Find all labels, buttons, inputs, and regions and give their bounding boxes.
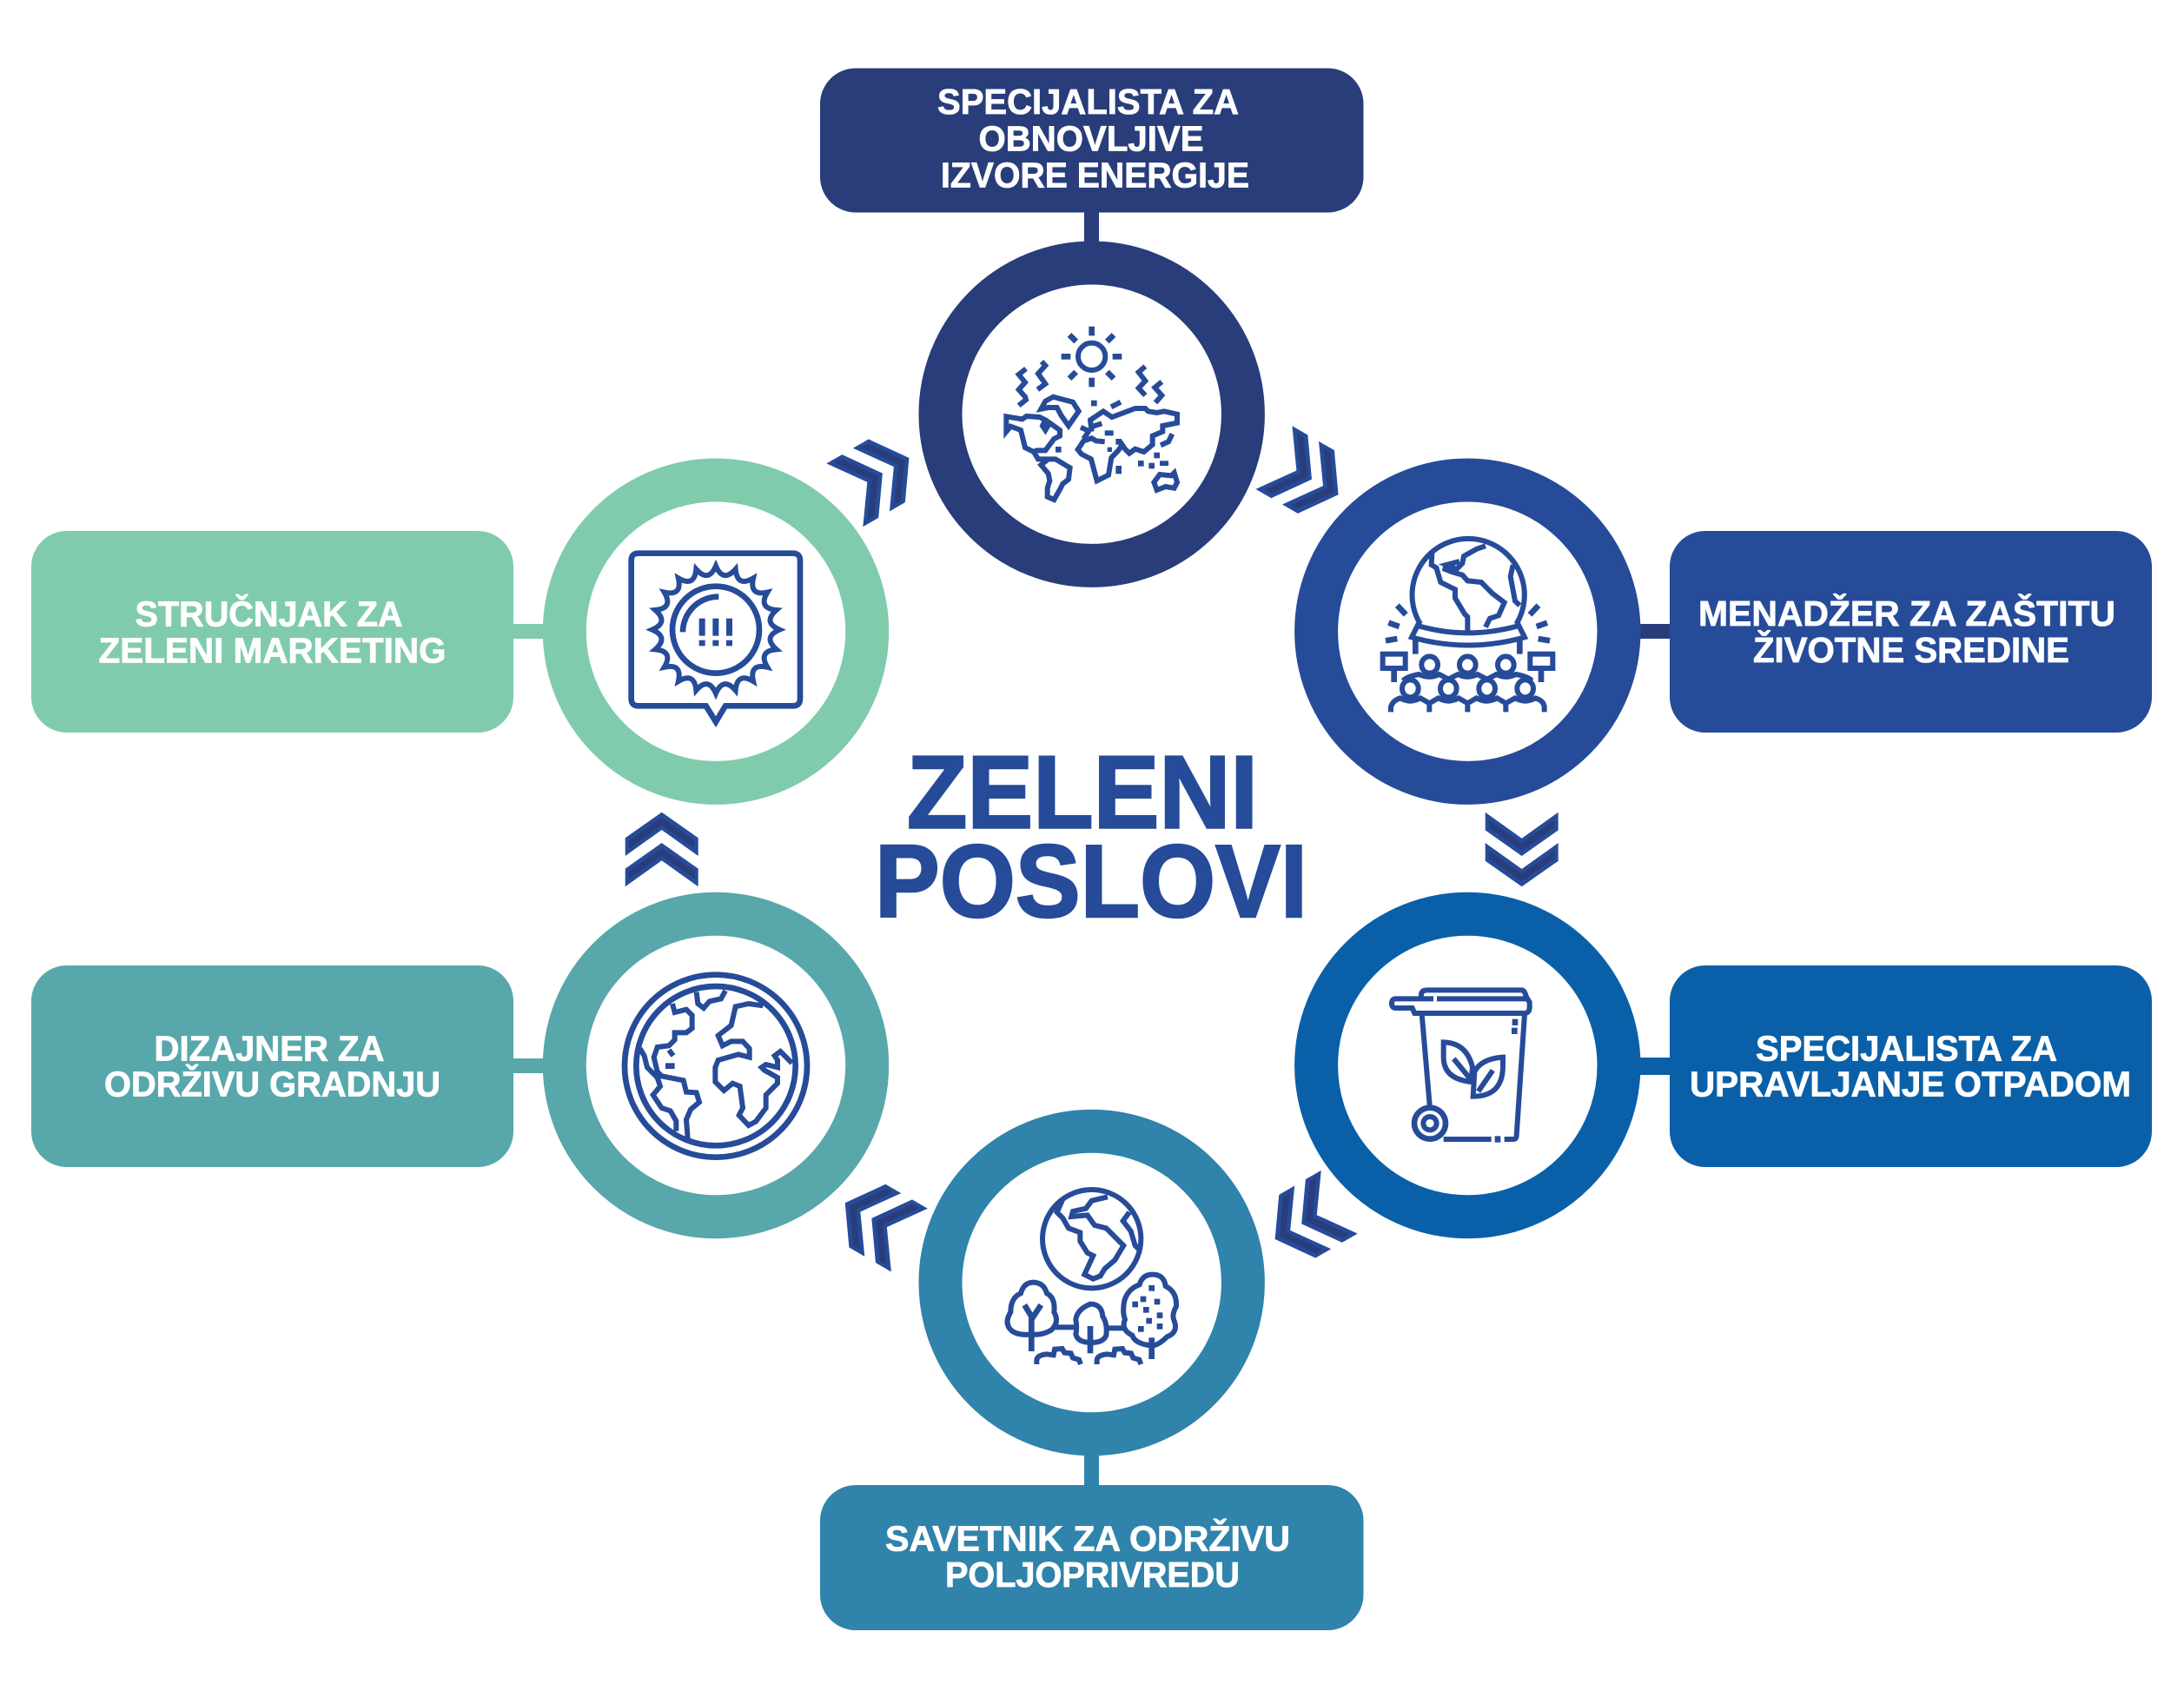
arrow: upper left to top: [826, 427, 927, 527]
title: Zeleni poslovi: ZELENI: [907, 735, 1258, 850]
ring: waste management: [1316, 914, 1619, 1217]
label box: sustainable construction designer: DIZAJNER ZA: [155, 1029, 384, 1069]
panel: green marketing expert: [31, 480, 867, 783]
ring: green marketing: [565, 480, 867, 783]
arrow: bottom to lower left: [827, 1171, 928, 1271]
title: Zeleni poslovi: POSLOVI: [875, 824, 1307, 939]
ring: sustainable construction: [565, 914, 867, 1217]
label box: green marketing expert: ZELENI MARKETING: [99, 631, 447, 671]
panel: environmental protection manager: [1316, 480, 2152, 783]
label box: environmental protection manager: ŽIVOTNE SREDINE: [1753, 630, 2069, 670]
label box: renewable energy specialist: [820, 68, 1364, 212]
icon: speech bubble with sun badge: [632, 554, 800, 722]
arrow: lower left to upper left: [625, 813, 698, 886]
label box: sustainable agriculture advisor: [820, 1485, 1364, 1630]
label box: renewable energy specialist: OBNOVLJIVE: [978, 118, 1204, 158]
label box: renewable energy specialist: SPECIJALISTA ZA: [937, 82, 1239, 122]
label box: environmental protection manager: MENADŽER ZA ZAŠTITU: [1698, 594, 2115, 633]
ring: renewable energy: [940, 262, 1243, 566]
label box: renewable energy specialist: IZVORE ENERGIJE: [941, 155, 1249, 195]
panel: sustainable construction designer: [31, 914, 867, 1217]
title: Zeleni poslovi: [875, 735, 1307, 939]
arrow: top to upper right: [1255, 426, 1357, 527]
label box: sustainable agriculture advisor: SAVETNIK ZA ODRŽIVU: [885, 1519, 1290, 1559]
label box: green marketing expert: [31, 531, 513, 733]
icon: earth globe: [625, 975, 807, 1157]
label box: sustainable construction designer: [31, 965, 513, 1167]
ring: sustainable agriculture: [940, 1131, 1243, 1434]
label box: waste management specialist: UPRAVLJANJE OTPADOM: [1690, 1064, 2131, 1104]
label box: sustainable construction designer: ODRŽIVU GRADNJU: [104, 1064, 440, 1104]
label box: waste management specialist: SPECIJALISTA ZA: [1756, 1029, 2057, 1069]
label box: waste management specialist: [1670, 965, 2152, 1167]
label box: green marketing expert: STRUČNJAK ZA: [136, 594, 403, 634]
icon: globe with trees: [1008, 1190, 1176, 1364]
icon: world map with sun: [1006, 327, 1177, 500]
icon: globe with crowd: [1383, 539, 1552, 712]
panel: waste management specialist: [1316, 914, 2152, 1217]
arrow: lower right to bottom: [1257, 1171, 1358, 1270]
arrow: upper right to lower right: [1486, 813, 1559, 886]
icon: recycling bin with leaves: [1392, 990, 1530, 1143]
panel: renewable energy specialist: [820, 68, 1364, 566]
panel: sustainable agriculture advisor: [820, 1131, 1364, 1630]
label box: sustainable agriculture advisor: POLJOPRIVREDU: [945, 1555, 1240, 1595]
label box: environmental protection manager: [1670, 531, 2152, 733]
ring: environmental protection: [1316, 480, 1619, 783]
